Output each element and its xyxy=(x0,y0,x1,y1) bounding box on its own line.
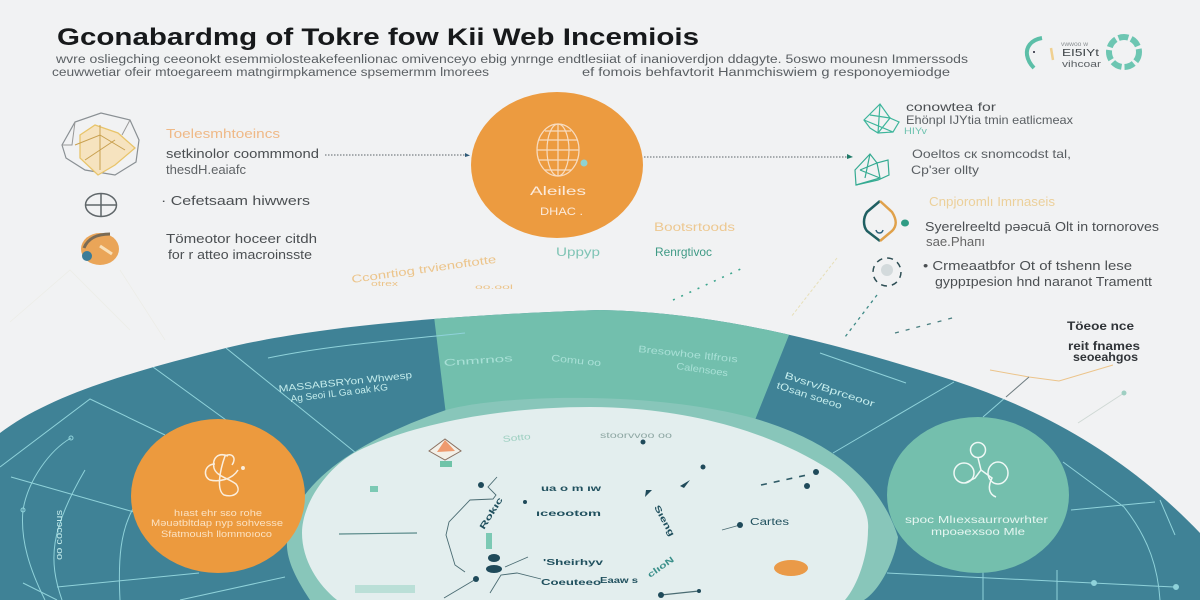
text: third right item: sae.Phaпı xyxy=(926,235,985,249)
panel: orange circle xyxy=(131,419,305,573)
text: angled orange label xyxy=(351,254,513,291)
text: centre labels: Renrgtivoc xyxy=(655,245,712,259)
mint circle caption: spoc Mlıexsaurrowrhter xyxy=(905,515,1049,526)
diagram labels: stoorvvoo oo xyxy=(600,430,672,440)
mint circle caption xyxy=(905,515,1049,538)
icon: lemon outline xyxy=(864,201,909,241)
icon: orange diamond xyxy=(429,439,461,467)
logo: vihcoar xyxy=(1062,59,1101,69)
subtitle text block: wvre osliegching ceeonokt esemmiolosteakefeenlionac omivenceyo ebig ynrnge endtlesiiat of inanioverdjon ddagyte. 5oswo mounesn Immerssods xyxy=(55,54,968,66)
icon: globe xyxy=(537,124,588,176)
diagram labels: Rokıc xyxy=(477,495,505,531)
inner pale disc xyxy=(302,407,868,600)
icon: round dish xyxy=(86,194,117,216)
text: fourth right item xyxy=(923,259,1153,289)
panel: central orange hub: Aleiles xyxy=(530,186,586,198)
logo: vwwoo w xyxy=(1061,41,1088,48)
diagram labels: clıoN xyxy=(645,554,676,580)
text: angled orange label: Cconrtiog trvienoftotte xyxy=(351,254,497,286)
text: first left item: thesdH.eaiafc xyxy=(166,163,246,177)
outer pale ring xyxy=(287,398,898,600)
orange circle caption: hıast ehr sɛo rohe xyxy=(174,508,262,519)
text: second right item: Ooeltos cк snomcodst tal, xyxy=(912,147,1071,161)
text: top right note xyxy=(1067,319,1140,364)
text: top right note: Töeoe nce xyxy=(1067,319,1134,333)
text: first right item: Ehönpl IJYtia tmin eatlicmeax xyxy=(906,113,1073,127)
text on dark band left: oo coɔcus xyxy=(54,510,65,560)
orange circle caption: Məuətbltdap nyp sohvesse xyxy=(151,518,283,529)
text: third left item xyxy=(166,232,317,262)
text: second left item: · Cefetsaam hiwwers xyxy=(161,194,310,208)
diagram labels: Cartes xyxy=(750,517,789,528)
text: second right item xyxy=(911,147,1071,177)
panel: central orange hub: DHAC . xyxy=(540,206,583,218)
text: first right item xyxy=(904,100,1073,136)
streaks above the dome xyxy=(10,258,1126,423)
connector lines xyxy=(339,475,807,598)
text on mint wedge: Cοmu oo xyxy=(551,353,602,369)
inner disc diagram xyxy=(339,430,819,598)
text on dark band right xyxy=(777,372,875,408)
mint circle caption: mpoəexsoo Mle xyxy=(931,527,1026,538)
orange circle caption xyxy=(151,508,283,540)
subtitle text block: ef fomois behfavtorit Hanmchiswiem g responoyemiodge xyxy=(582,67,950,79)
text: centre labels: Bootsrtoods xyxy=(654,220,735,234)
text: fourth right item: gyppɪpesion hnd naranot Tramentt xyxy=(935,275,1153,289)
dark nodes xyxy=(473,440,819,598)
diagram labels: Coeuteeo xyxy=(541,577,601,587)
text on dark band right: tՕsan soeoo xyxy=(775,380,843,412)
diagram labels: Sıeng xyxy=(652,503,677,538)
icon: faceted gem xyxy=(62,113,139,175)
icon: ampersand glyph xyxy=(205,455,244,496)
text on mint wedge: Calensoes xyxy=(676,361,729,379)
icon: dashed circle xyxy=(873,258,901,286)
text on mint wedge: Bresowhoe ltlfroıs xyxy=(638,344,739,365)
logo xyxy=(1027,37,1139,69)
orange blob xyxy=(774,560,808,576)
network lines xyxy=(0,333,1178,600)
text on mint wedge xyxy=(444,346,738,376)
arrow: left item to hub xyxy=(325,153,470,157)
arrow: hub to right item xyxy=(644,154,853,159)
text: first left item xyxy=(166,127,319,177)
diagram labels: Sotto xyxy=(502,431,531,444)
text: third right item xyxy=(925,195,1159,249)
panel: central orange hub xyxy=(471,92,643,238)
text: first right item: HIYv xyxy=(904,126,928,136)
diagram labels: ua o m ıw xyxy=(541,483,602,493)
text: angled orange label: otrex xyxy=(371,281,399,288)
text: fourth right item: • Crmeaatbfor Ot of tshenn lese xyxy=(923,259,1132,273)
text: first left item: Toelesmhtoeincs xyxy=(166,127,280,141)
diagram labels: 'Sheirhyv xyxy=(543,557,603,567)
subtitle text block: ceuwwetiar ofeir mtoegareem matngirmpkamence spsemermm lmorees xyxy=(52,67,489,79)
orange circle caption: Sfatmoush llommoıoco xyxy=(161,529,272,540)
icon: teal gem one xyxy=(864,104,899,133)
text on dark band left xyxy=(54,370,413,560)
text: third right item: Syerelreeltd pəəcuā Olt in tornoroves xyxy=(925,220,1159,234)
diagram labels xyxy=(477,430,789,587)
diagram labels: Eaaw s xyxy=(600,575,638,585)
icon: orange badge xyxy=(81,233,119,265)
faint green marks xyxy=(355,486,492,593)
text: first left item: setkinolor coommmond xyxy=(166,147,319,161)
text: third left item: for r atteo imacroinsste xyxy=(168,248,312,262)
panel: mint circle xyxy=(887,417,1069,573)
icon: three linked circles xyxy=(954,442,1008,497)
text: centre labels: Uppyp xyxy=(556,245,600,259)
text: first right item: conowtea for xyxy=(906,100,996,114)
text: third right item: Cnpjoromlı Imrnaseis xyxy=(929,195,1055,209)
mint wedge xyxy=(434,310,789,419)
text: centre labels xyxy=(556,220,735,259)
text on mint wedge: Cnmrnos xyxy=(443,353,513,369)
title: Gconabardmg of Tokre fow Kii Web Incemiois xyxy=(57,24,699,51)
panel: dome with rings xyxy=(0,300,1200,600)
text on dark band right: Bvsrv/Bprceoor xyxy=(783,370,876,410)
icon: teal gem two xyxy=(855,154,889,185)
text: second right item: Cp'зer ollty xyxy=(911,163,979,177)
diagram labels: ıceootom xyxy=(536,508,602,518)
subtitle text block xyxy=(52,54,968,79)
text on dark band left: MASSABSRYon Whwesp xyxy=(278,370,413,395)
text: angled orange label: oo.ool xyxy=(475,285,513,291)
text: top right note: reit fnames xyxy=(1068,339,1140,353)
logo: EI5IYt xyxy=(1062,48,1099,59)
text on dark band left: Ag Seoi IL Ga oak KG xyxy=(290,382,389,405)
text: top right note: seoeahgos xyxy=(1073,350,1138,364)
text: third left item: Tömeotor hoceer citdh xyxy=(166,232,317,246)
